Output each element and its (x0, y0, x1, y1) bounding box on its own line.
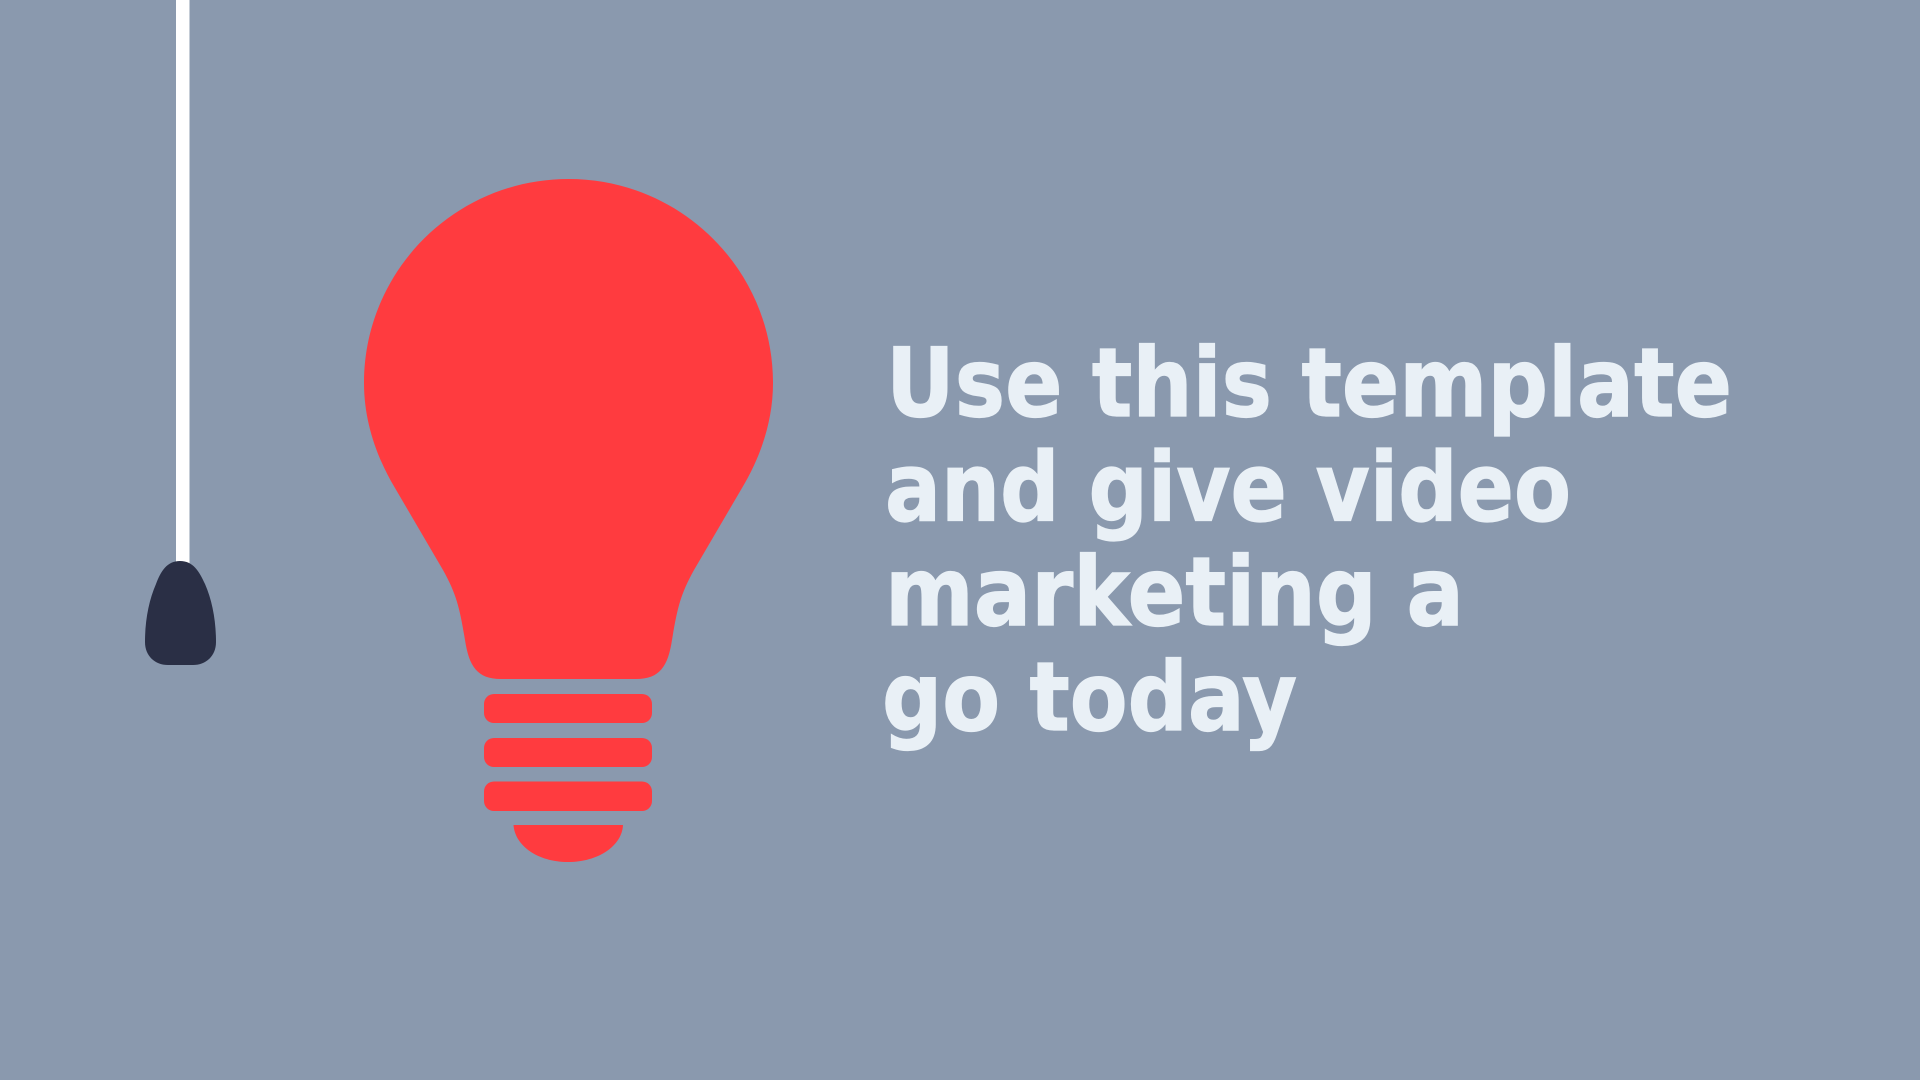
heading: go today (882, 643, 1297, 753)
heading: marketing a (885, 538, 1464, 648)
bulb glass (364, 179, 773, 679)
heading (882, 329, 1732, 753)
bulb base ring 2 (484, 738, 652, 767)
bulb base ring 1 (484, 694, 652, 723)
bulb base cap (514, 825, 623, 862)
pull cord (145, 0, 216, 665)
heading: Use this template (886, 329, 1732, 439)
icon: pull cord weight (145, 561, 216, 665)
heading: and give video (885, 434, 1571, 544)
bulb base ring 3 (484, 782, 652, 811)
icon: red light bulb (364, 179, 773, 862)
